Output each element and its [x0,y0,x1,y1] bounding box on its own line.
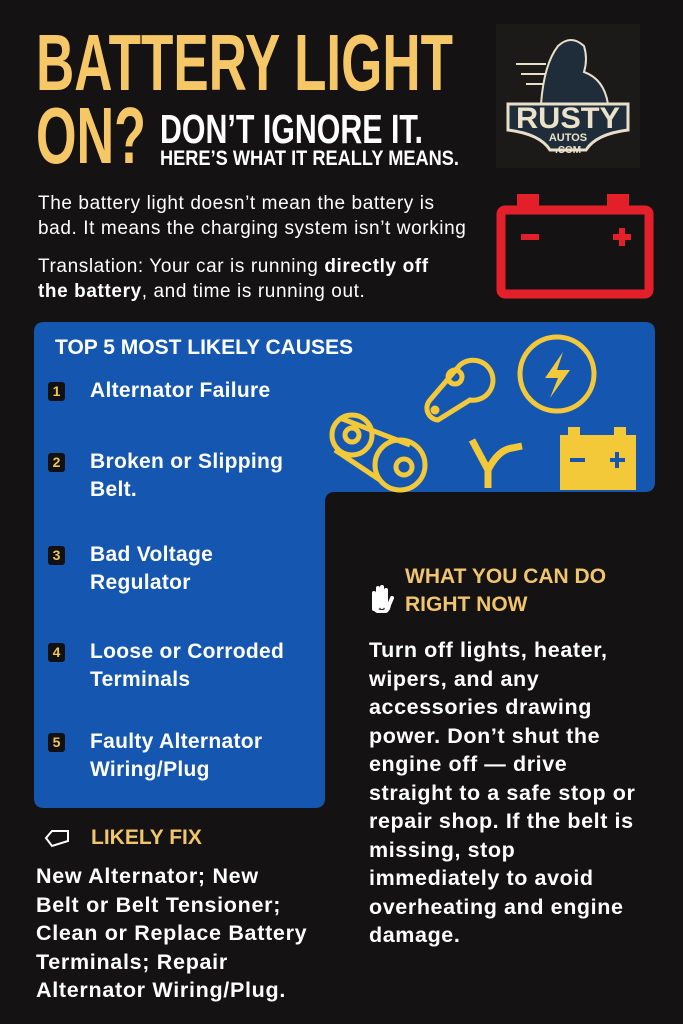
text: actions: immediately to avoid [369,866,594,890]
icon: belt [332,415,425,490]
cause 1: 1 [53,383,60,399]
translation text: Translation: Your car is running directly off [38,256,429,277]
logo: Rusty Autos: RUSTY [516,102,620,135]
cause 5 [48,730,262,781]
text: actions: missing, stop [369,838,515,862]
text: likely fix: Belt or Belt Tensioner; [36,892,281,916]
cause 4: 4 [53,644,60,660]
cause 4: Terminals [90,668,190,691]
text: actions: accessories drawing [369,695,592,719]
text: likely fix: Clean or Replace Battery [36,921,307,945]
icon: hand [372,585,394,613]
logo: Rusty Autos [496,24,640,168]
text: actions: damage. [369,923,460,947]
text: actions: wipers, and any [369,666,539,690]
text: actions [368,638,635,947]
heading: what you can do: WHAT YOU CAN DO [405,565,606,588]
intro text: bad. It means the charging system isn’t working [38,218,466,239]
intro text: The battery light doesn’t mean the battery is [38,193,435,214]
translation text: the battery, and time is running out. [38,281,365,302]
icons: cause icons [330,334,636,492]
cause 4: Loose or Corroded [90,640,284,663]
cause 1: Alternator Failure [90,379,270,402]
text: actions: straight to a safe stop or [369,780,635,804]
text: likely fix: Alternator Wiring/Plug. [36,978,286,1002]
cause 3 [48,543,213,594]
heading: likely fix: LIKELY FIX [91,826,202,849]
cause 3: 3 [53,547,60,563]
cause 4 [48,640,284,691]
cause 2 [48,450,283,501]
text: likely fix: Terminals; Repair [36,950,228,974]
intro text [38,193,466,239]
heading: what you can do: RIGHT NOW [405,593,527,616]
cause 2: Belt. [90,478,137,501]
text: actions: engine off — drive [369,752,567,776]
text: actions: Turn off lights, heater, [369,638,608,662]
cause 3: Regulator [90,571,191,594]
icon: yellow battery [560,427,636,490]
text: actions: repair shop. If the belt is [369,809,634,833]
title [36,18,459,180]
icon: tensioner [427,360,493,420]
logo: Rusty Autos: AUTOS [549,132,587,144]
icon: wiring [472,440,522,488]
text: likely fix: New Alternator; New [36,864,259,888]
panel: causes (blue L-shape) [34,322,655,808]
title: ON? [36,91,146,180]
icon: red battery [496,194,654,298]
heading: what you can do [405,565,606,616]
text: likely fix [36,864,307,1002]
cause 5: Wiring/Plug [90,758,210,781]
icon: tag [44,830,69,848]
translation text [38,256,429,302]
logo: Rusty Autos: .COM [555,145,581,156]
cause 5: 5 [53,734,60,750]
heading: top 5 causes: TOP 5 MOST LIKELY CAUSES [55,336,353,359]
cause 2: Broken or Slipping [90,450,283,473]
text: actions: power. Don’t shut the [369,724,600,748]
text: actions: overheating and engine [369,894,624,918]
cause 3: Bad Voltage [90,543,213,566]
cause 2: 2 [53,454,60,470]
icon: lightning [520,337,594,411]
cause 5: Faulty Alternator [90,730,262,753]
